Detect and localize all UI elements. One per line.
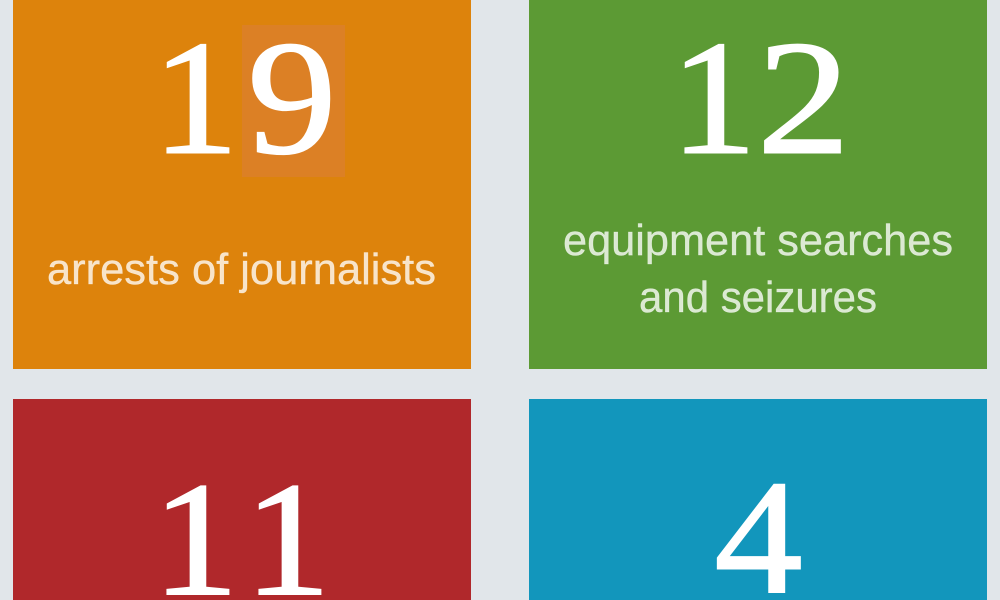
panel: arrests of journalists xyxy=(13,0,471,369)
panel: blue count xyxy=(529,399,987,600)
label: equipment searches and seizures: equipment searches xyxy=(563,216,953,265)
label: equipment searches and seizures: and seizures xyxy=(639,273,877,322)
label: equipment searches and seizures xyxy=(563,216,953,322)
number: 19 xyxy=(152,7,336,188)
number: 19: 9 xyxy=(248,7,336,188)
number: 11 xyxy=(166,485,322,595)
highlight behind digit 9 xyxy=(242,25,345,177)
number: 19: 1 xyxy=(152,8,239,188)
number: 12: 1 xyxy=(670,8,757,188)
panel: equipment searches and seizures xyxy=(529,0,987,369)
number: 12: 2 xyxy=(757,7,850,188)
number: 12 xyxy=(670,7,850,188)
panel: red count xyxy=(13,399,471,600)
label: arrests of journalists: arrests of journalists xyxy=(47,245,436,294)
